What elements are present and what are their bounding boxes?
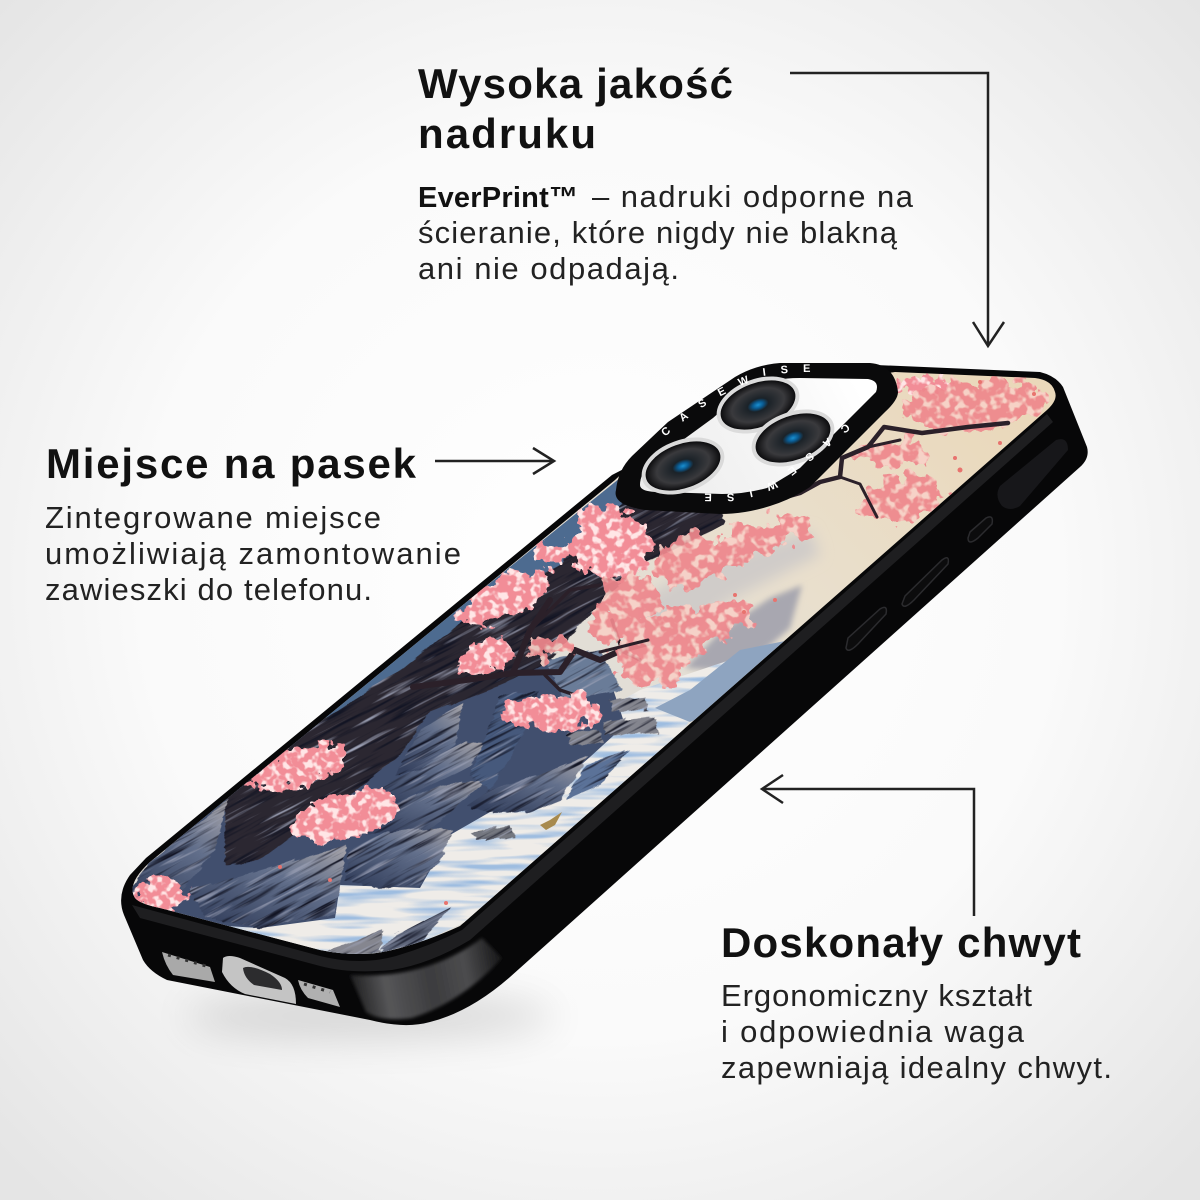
- text block: strap slot description: [45, 500, 461, 607]
- arrow: strap slot to camera: [435, 448, 554, 474]
- camera ring lettering: CASEWISE: [704, 424, 850, 502]
- art rocks: [125, 798, 228, 908]
- phone artwork: [132, 363, 1056, 954]
- case rim bevel: [132, 414, 1053, 971]
- text block: print quality description: – nadruki odporne na: [592, 179, 914, 214]
- art rock base: [125, 655, 625, 928]
- camera bump: [616, 363, 898, 514]
- phone case body: [121, 363, 1088, 1025]
- text block: print quality description: ani nie odpadają.: [418, 251, 679, 286]
- phone: [121, 363, 1088, 1026]
- bottom left speaker: [162, 952, 215, 982]
- arrow: print quality to phone: [790, 73, 1004, 346]
- bottom right speaker: [298, 980, 340, 1007]
- camera ring: [616, 363, 898, 514]
- art blue mountain: [655, 640, 790, 722]
- side buttons: [846, 439, 1068, 650]
- art bird: [540, 812, 562, 830]
- art blossoms salmon: [528, 376, 1050, 687]
- art mist: [646, 531, 820, 618]
- text block: print quality description: [418, 179, 914, 286]
- lens top: [709, 366, 807, 444]
- art branches: [413, 585, 648, 695]
- text block: grip description: Ergonomiczny kształt: [721, 978, 1032, 1013]
- text block: print quality description: ścieranie, które nigdy nie blakną: [418, 215, 898, 250]
- text block: grip description: [721, 978, 1112, 1085]
- text block: grip description: zapewniają idealny chwyt.: [721, 1050, 1112, 1085]
- art falling petals: [278, 380, 1036, 905]
- art dark tree mass: [225, 490, 725, 865]
- heading: print quality: [418, 60, 733, 157]
- art sky: [132, 372, 1056, 954]
- art blue underlayer: [234, 480, 623, 793]
- camera ring lettering: [622, 364, 850, 502]
- charging port: [222, 956, 296, 1004]
- text block: strap slot description: zawieszki do telefonu.: [45, 572, 372, 607]
- text block: strap slot description: umożliwiają zamontowanie: [45, 536, 461, 571]
- lens left: [634, 427, 732, 505]
- text block: strap slot description: Zintegrowane miejsce: [45, 500, 381, 535]
- art distant mountain: [685, 585, 802, 672]
- camera ring lettering: CASEWISE: [622, 364, 810, 468]
- text block: grip description: i odpowiednia waga: [721, 1014, 1025, 1049]
- arrow: grip to phone side: [762, 775, 974, 916]
- heading: print quality: nadruku: [418, 110, 596, 157]
- art rock and tree textures: [132, 503, 726, 954]
- phone shadow: [185, 994, 555, 1038]
- art blossoms pink: [132, 375, 953, 914]
- art water: [225, 660, 730, 958]
- heading: strap slot: Miejsce na pasek: [46, 440, 417, 487]
- lens right: [744, 399, 842, 477]
- text block: print quality description: EverPrint™: [418, 182, 578, 214]
- art upper branches: [600, 423, 1008, 652]
- heading: print quality: Wysoka jakość: [418, 60, 733, 107]
- camera glass: [640, 378, 877, 494]
- case bottom highlight: [350, 938, 502, 1019]
- heading: grip: Doskonały chwyt: [721, 919, 1081, 966]
